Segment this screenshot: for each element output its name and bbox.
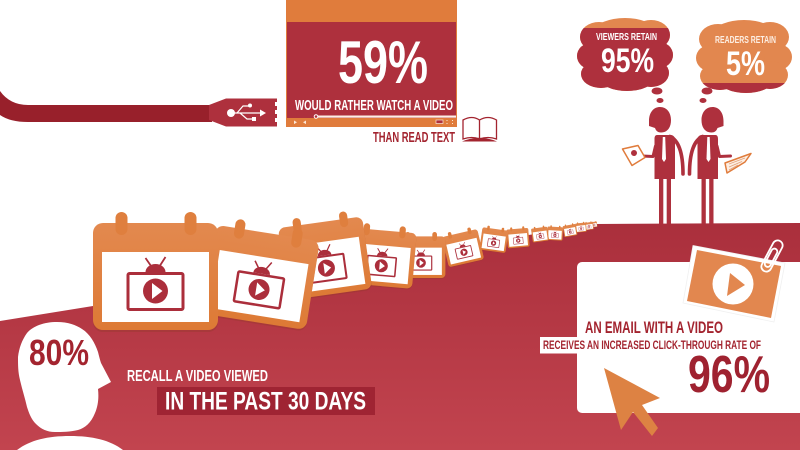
USB connector — [209, 98, 277, 126]
shoulders — [17, 436, 123, 450]
cable cord — [0, 91, 212, 122]
59% figure: 59% — [338, 29, 428, 96]
viewers label: VIEWERS RETAIN — [596, 31, 657, 43]
head — [18, 322, 111, 432]
progress bar — [314, 115, 456, 118]
calendar 12 — [575, 222, 587, 233]
connector teeth — [275, 102, 277, 122]
thought cloud: viewers — [577, 18, 673, 91]
icon: text tablet — [725, 154, 751, 173]
viewer body — [642, 107, 683, 224]
video caption: WOULD RATHER WATCH A VIDEO — [295, 98, 453, 114]
label strip — [540, 337, 766, 354]
calendar 1 — [93, 212, 218, 332]
recall caption: RECALL A VIDEO VIEWED — [127, 368, 268, 385]
caption: than read text: THAN READ TEXT — [373, 130, 455, 146]
reader body — [690, 107, 730, 224]
player controls — [294, 120, 453, 124]
calendar 11 — [562, 223, 577, 237]
calendar 14 — [590, 221, 597, 228]
calendar 8 — [506, 226, 530, 249]
video thumbnail clipped to card — [683, 246, 785, 322]
calendar row receding into distance — [93, 209, 597, 332]
cloud shape — [577, 18, 673, 91]
80% figure: 80% — [29, 332, 89, 373]
icon: video tablet — [622, 146, 645, 166]
panel: email click-through — [540, 239, 800, 413]
calendar 13 — [584, 221, 594, 230]
icon: open book — [462, 118, 497, 142]
video player panel — [286, 0, 457, 127]
95% figure: 95% — [601, 42, 654, 80]
thought bubbles — [652, 88, 712, 103]
email card — [577, 262, 800, 413]
figure: reader with tablet — [690, 107, 751, 224]
calendar 7 — [479, 225, 509, 253]
calendar 6 — [441, 226, 484, 268]
head and shoulders silhouette — [17, 322, 123, 450]
email heading: AN EMAIL WITH A VIDEO — [585, 319, 723, 337]
calendar 9 — [531, 225, 549, 243]
thought cloud: readers — [696, 20, 792, 93]
cloud shape — [696, 20, 792, 93]
calendar 2 — [202, 216, 321, 332]
calendar 4 — [347, 222, 417, 290]
calendar 10 — [547, 225, 563, 241]
calendar 5 — [397, 232, 445, 279]
USB cable — [0, 91, 277, 126]
figure: viewer with tablet — [622, 107, 683, 224]
icon: cursor arrow — [604, 368, 660, 436]
background ground slope — [0, 223, 800, 450]
player screen — [287, 22, 456, 118]
player frame — [286, 0, 457, 127]
icon: paperclip — [760, 239, 784, 273]
icon: USB symbol — [227, 104, 266, 121]
banner: in the past 30 days: IN THE PAST 30 DAYS — [165, 388, 366, 416]
5% figure: 5% — [726, 45, 765, 83]
calendar 3 — [277, 209, 372, 302]
96% figure: 96% — [688, 346, 770, 404]
